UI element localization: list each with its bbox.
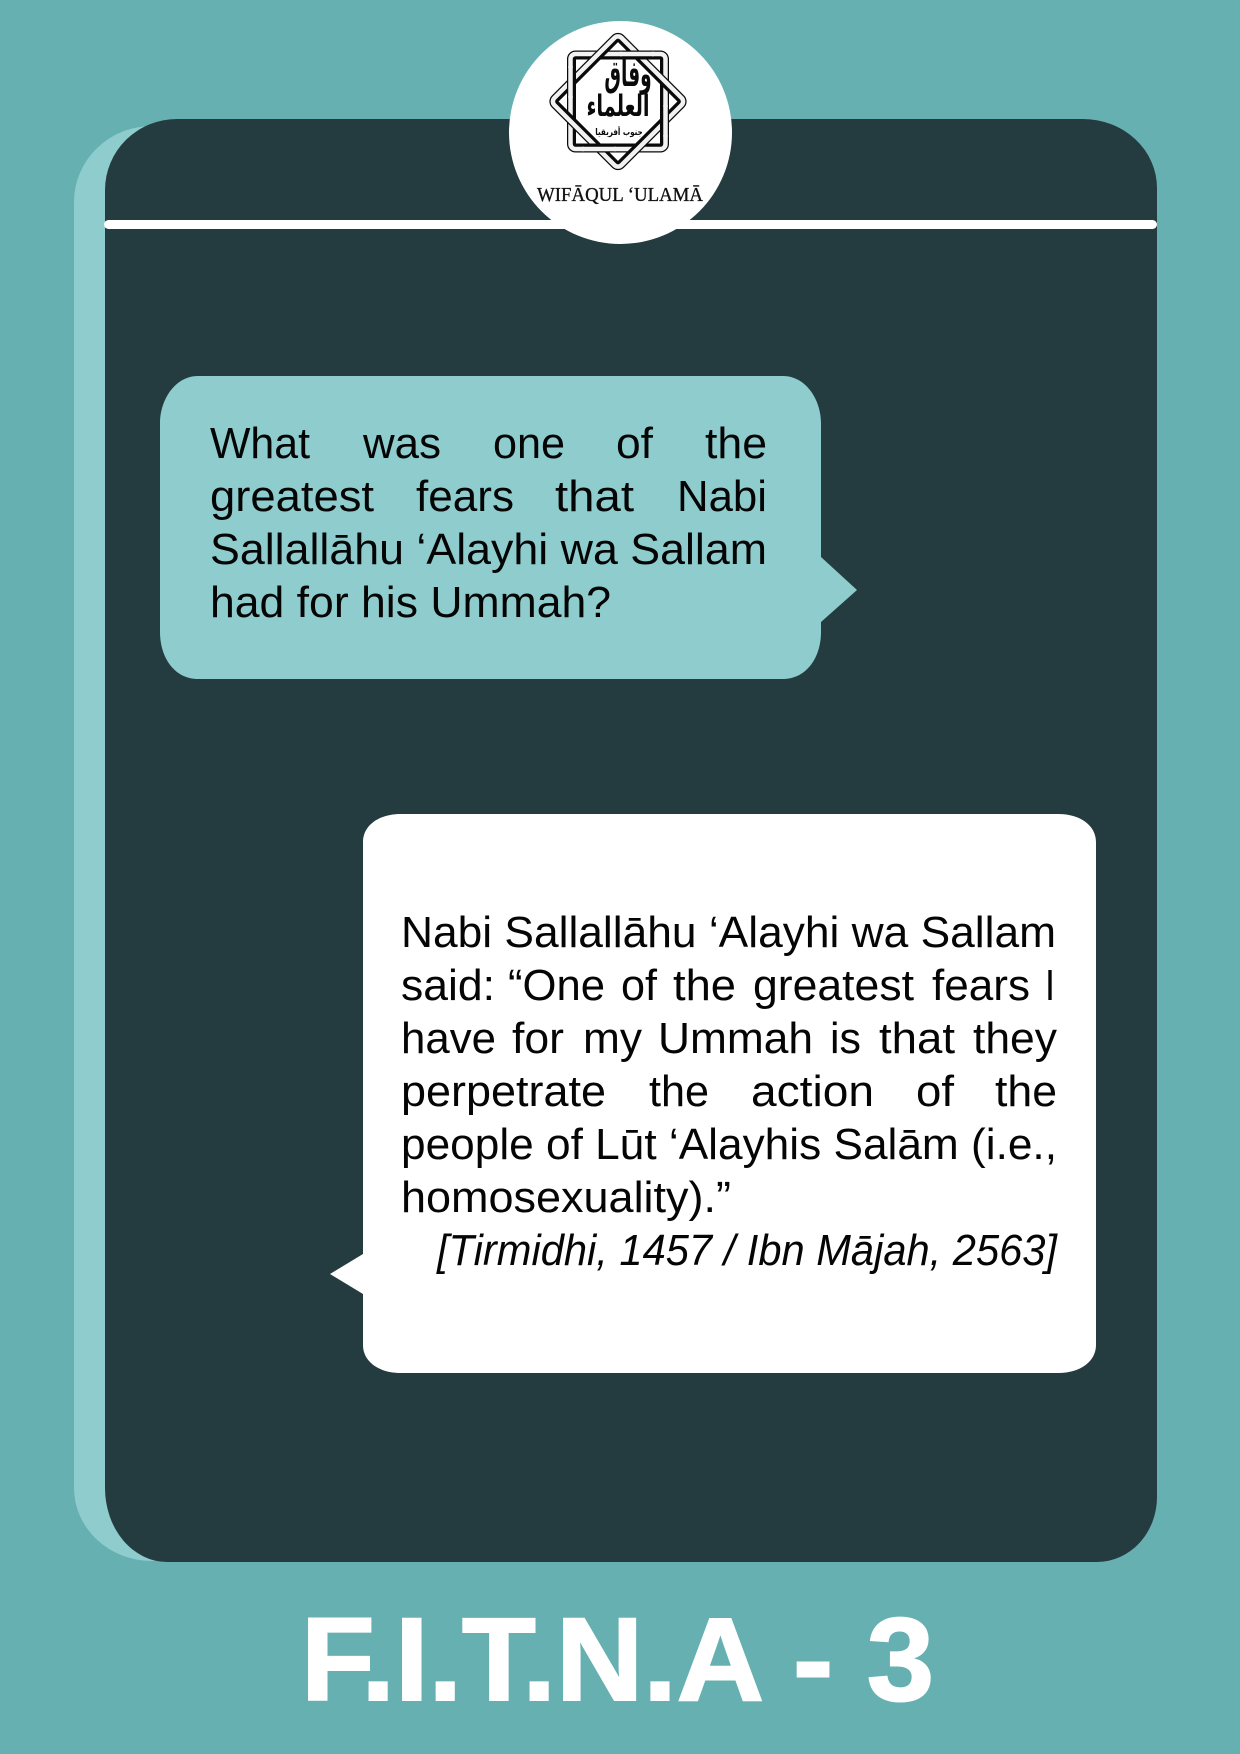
hadith text: the [673, 961, 736, 1010]
question text: fears [416, 472, 514, 521]
emblem calligraphy [586, 52, 652, 138]
question text: that [555, 472, 634, 521]
hadith text: I [1045, 961, 1055, 1010]
question text: the [705, 419, 767, 468]
hadith text: that [879, 1014, 955, 1063]
hadith text: Ummah [658, 1014, 813, 1063]
hadith text: perpetrate [401, 1067, 606, 1116]
hadith text: fears [932, 961, 1030, 1010]
hadith citation: [Tirmidhi, 1457 / Ibn Mājah, 2563] [436, 1226, 1059, 1275]
panel: offset light backing [74, 126, 300, 1561]
hadith text: have [401, 1014, 496, 1063]
emblem calligraphy: وفاق [604, 52, 652, 95]
hadith text: they [973, 1014, 1057, 1063]
question speech bubble [160, 376, 857, 679]
hadith text: is [830, 1014, 861, 1063]
hadith text: the [995, 1067, 1057, 1116]
answer speech bubble [330, 814, 1096, 1373]
question text: of [616, 419, 654, 468]
question text: greatest [210, 472, 374, 521]
question text: had for his Ummah? [210, 578, 611, 627]
question text: Sallallāhu ‘Alayhi wa Sallam [210, 525, 767, 574]
emblem calligraphy: جنوب أفريقيا [595, 126, 643, 138]
hadith text: people of Lūt ‘Alayhis Salām (i.e., [401, 1120, 1057, 1169]
question text: was [362, 419, 441, 468]
icon: interlaced square emblem [551, 34, 685, 169]
hadith text: action [751, 1067, 874, 1116]
hadith text: greatest [753, 961, 914, 1010]
panel: dark main card [105, 119, 1157, 1562]
logo badge [509, 21, 732, 244]
hadith text: said: [401, 961, 495, 1010]
question text: Nabi [677, 472, 767, 521]
hadith text: of [916, 1067, 955, 1116]
emblem calligraphy: العلماء [586, 89, 650, 123]
header divider bar [104, 220, 1157, 229]
hadith text: my [583, 1014, 642, 1063]
hadith text: of [621, 961, 658, 1010]
hadith text: the [649, 1067, 709, 1116]
logo wordmark: WIFĀQUL ‘ULAMĀ [537, 184, 704, 206]
hadith text: homosexuality).” [401, 1173, 731, 1222]
hadith text: “One [508, 961, 605, 1010]
hadith text: for [512, 1014, 564, 1063]
question text: What [210, 419, 310, 468]
hadith text: Nabi Sallallāhu ‘Alayhi wa Sallam [401, 908, 1056, 957]
title: F.I.T.N.A - 3 [301, 1594, 934, 1726]
question text: one [493, 419, 565, 468]
